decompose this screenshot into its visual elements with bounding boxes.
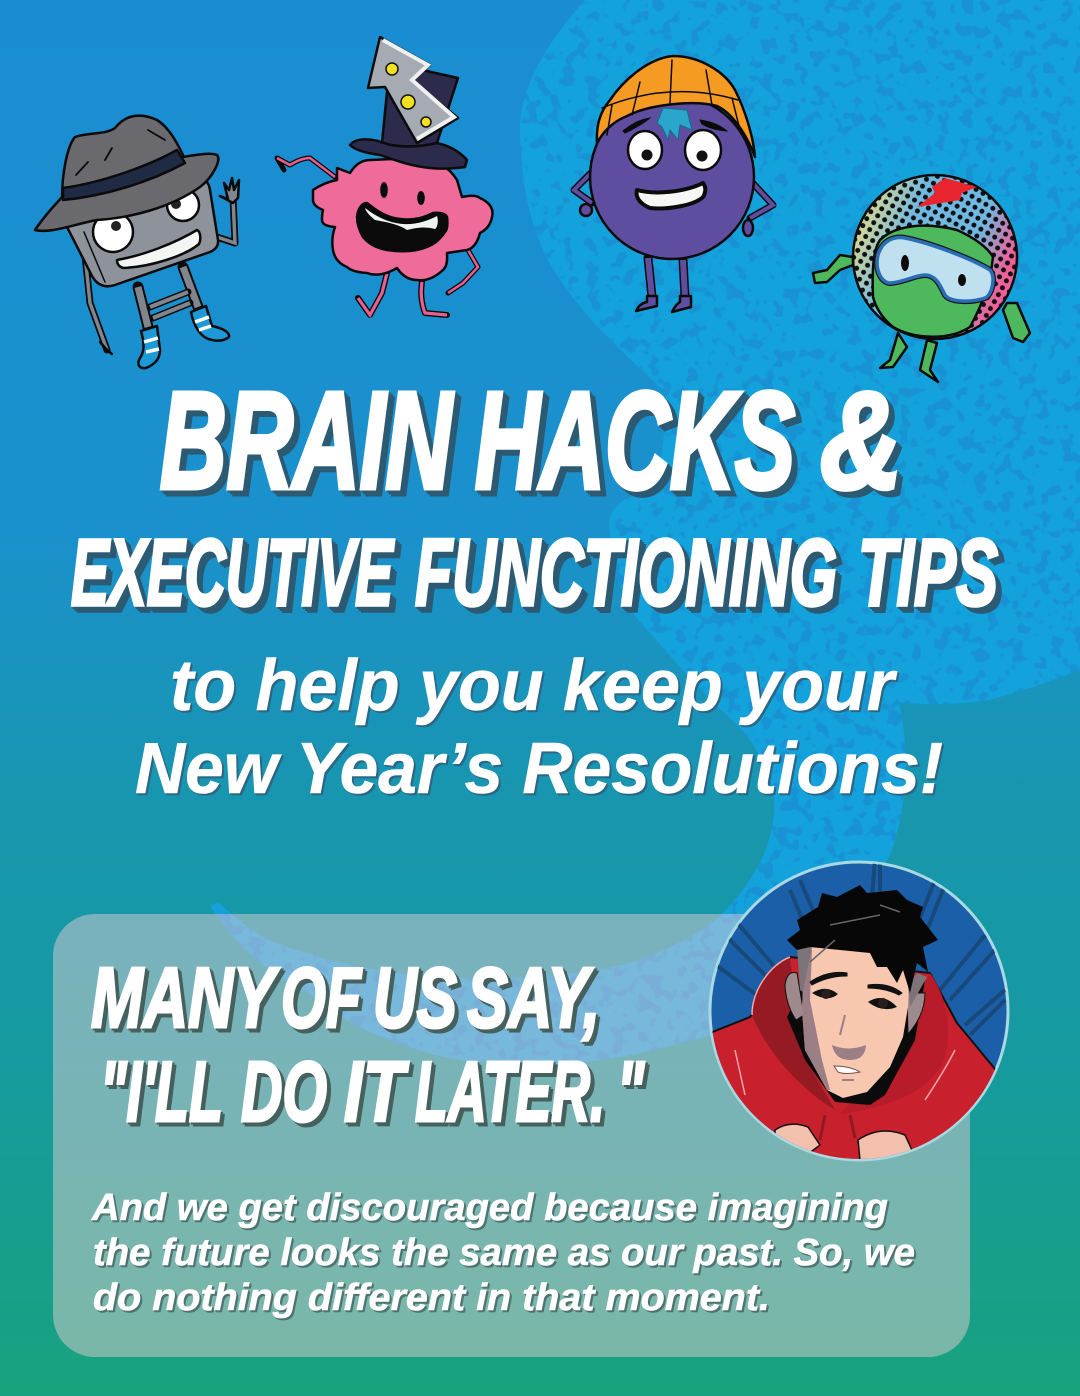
panel heading: OF (281, 951, 362, 1046)
subtitle (135, 646, 943, 809)
panel heading: "I'LL (100, 1045, 223, 1140)
icon: pink brain character with top hat and arrow (277, 37, 492, 315)
panel heading: " (617, 1045, 645, 1140)
panel heading: MANY (91, 951, 280, 1046)
panel heading: DO (241, 1045, 327, 1140)
portrait: worried teen in red hoodie (705, 860, 1008, 1180)
background swoosh with speckle texture (210, 0, 1080, 1064)
panel heading (91, 951, 645, 1140)
icon: purple character with orange beanie (574, 56, 773, 312)
panel heading: US (373, 951, 457, 1046)
panel body text: And we get discouraged because imagining (91, 1187, 888, 1229)
title: Brain Hacks &: & (820, 364, 902, 518)
title: Executive Functioning Tips: EXECUTIVE (71, 520, 395, 626)
title: Brain Hacks &: BRAIN (160, 364, 454, 518)
title: Executive Functioning Tips (71, 520, 998, 626)
subtitle: New Year’s Resolutions! (135, 729, 943, 809)
panel body text: the future looks the same as our past. So, we (93, 1232, 915, 1274)
subtitle: to help you keep your (170, 646, 898, 726)
title: Brain Hacks &: HACKS (475, 364, 795, 518)
icon: robot character with fedora (35, 116, 239, 368)
panel body text: do nothing different in that moment. (93, 1277, 770, 1319)
translucent panel (53, 914, 970, 1357)
title: Executive Functioning Tips: TIPS (858, 520, 998, 626)
panel heading: SAY, (467, 951, 600, 1046)
panel heading: IT (344, 1045, 409, 1140)
panel body text (91, 1187, 915, 1319)
icon: green character with helmet and goggles (813, 175, 1030, 382)
title: Brain Hacks & (160, 364, 902, 518)
title: Executive Functioning Tips: FUNCTIONING (415, 520, 837, 626)
panel heading: LATER. (415, 1045, 605, 1140)
